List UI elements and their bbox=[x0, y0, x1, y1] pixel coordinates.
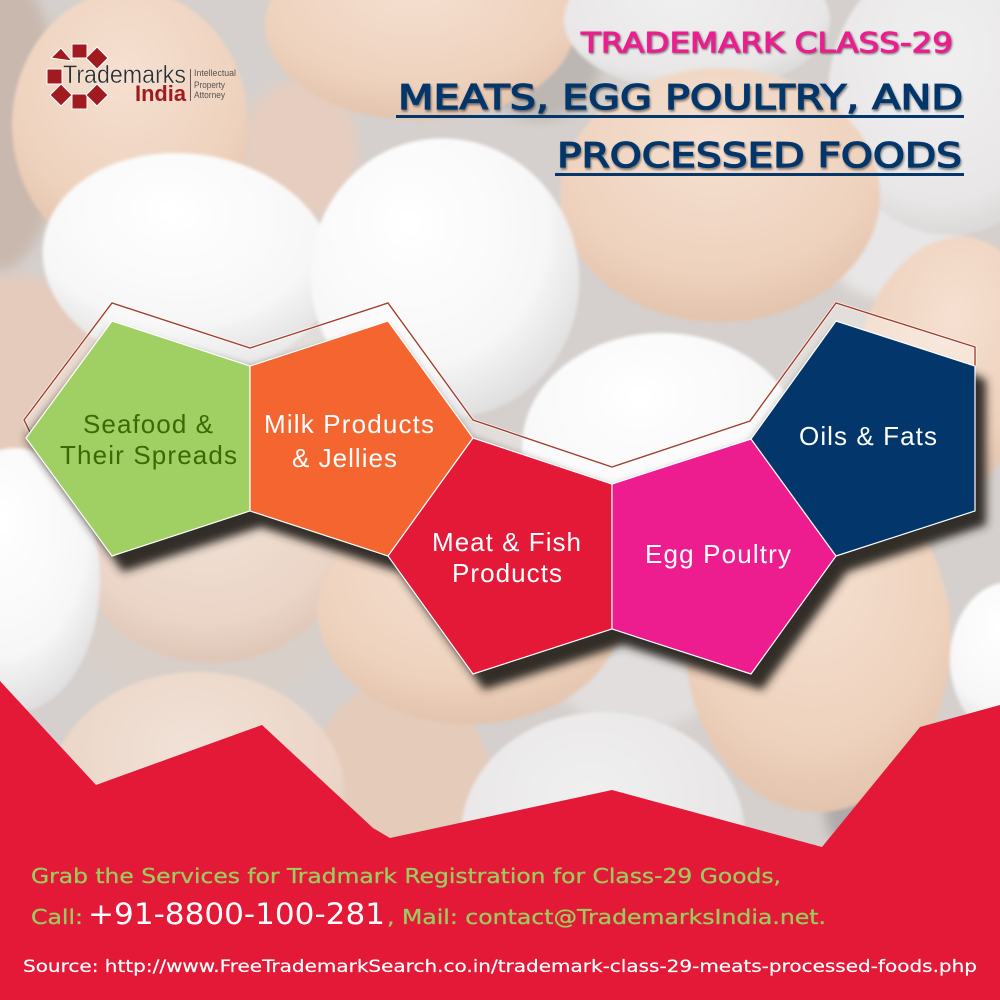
footer contact line bbox=[31, 897, 826, 931]
pentagon: milk products bbox=[250, 321, 473, 556]
logo tagline: Intellectual bbox=[194, 68, 236, 78]
pentagon: egg poultry bbox=[612, 439, 836, 674]
pentagon drop shadow bbox=[26, 330, 986, 690]
outline: zigzag line above pentagons bbox=[24, 303, 975, 467]
footer call to action: Grab the Services for Tradmark Registration for Class-29 Goods, bbox=[31, 864, 781, 888]
logo India word: India bbox=[135, 81, 187, 106]
footer contact line: Call: bbox=[31, 905, 83, 929]
logo mark bbox=[47, 44, 108, 109]
pentagon: seafood: Their Spreads bbox=[60, 440, 237, 470]
title line one: MEATS, EGG POULTRY, AND bbox=[398, 78, 963, 118]
logo tagline bbox=[194, 68, 236, 100]
subtitle: trademark class: TRADEMARK CLASS-29 bbox=[580, 26, 953, 59]
title underline one bbox=[396, 115, 964, 118]
pentagon: oils and fats: Oils & Fats bbox=[799, 421, 937, 451]
footer contact line: , Mail: contact@TrademarksIndia.net. bbox=[387, 905, 826, 929]
logo tagline: Property bbox=[194, 80, 225, 90]
pentagon: egg poultry: Egg Poultry bbox=[645, 539, 791, 569]
pentagon: meat and fish: Products bbox=[452, 558, 562, 588]
pentagon chain bbox=[26, 321, 975, 674]
pentagon: meat and fish: Meat & Fish bbox=[432, 527, 581, 557]
logo wordmark: Trademarks bbox=[63, 61, 186, 89]
logo tagline: Attorney bbox=[194, 90, 225, 100]
title line two: PROCESSED FOODS bbox=[557, 136, 962, 176]
logo divider bbox=[190, 69, 191, 101]
pentagon: seafood bbox=[26, 321, 250, 556]
footer contact line: +91-8800-100-281 bbox=[88, 897, 385, 931]
header title block bbox=[396, 26, 964, 176]
pentagon: meat and fish bbox=[388, 438, 612, 674]
logo: Trademarks India bbox=[47, 44, 236, 109]
red footer panel bbox=[0, 681, 1000, 1000]
translucent band behind outline bbox=[24, 303, 975, 484]
pentagon: seafood: Seafood & bbox=[83, 409, 213, 439]
footer source line: Source: http://www.FreeTrademarkSearch.co.in/trademark-class-29-meats-processed-foods.php bbox=[23, 957, 977, 977]
title underline two bbox=[555, 173, 964, 176]
pentagon: milk products: & Jellies bbox=[292, 443, 397, 473]
pentagon: milk products: Milk Products bbox=[264, 409, 434, 439]
pentagon: oils and fats bbox=[751, 321, 975, 556]
